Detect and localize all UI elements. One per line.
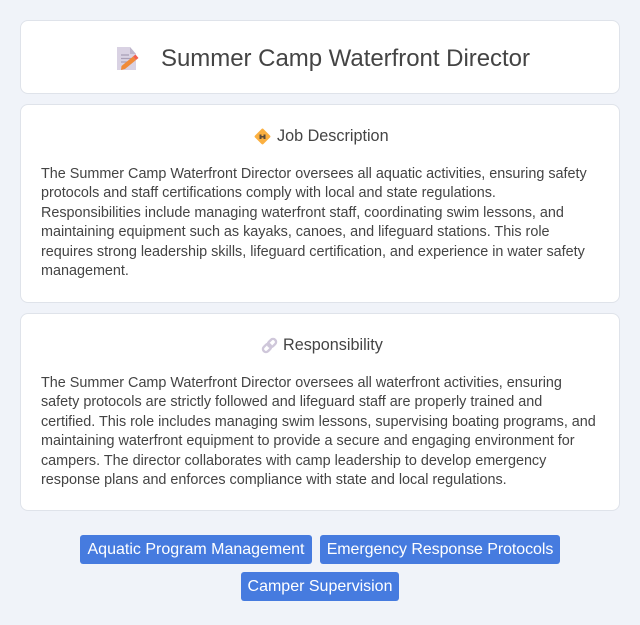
- icon: chain link: [262, 338, 278, 354]
- tag: emergency response protocols: Emergency Response Protocols: [327, 541, 553, 558]
- text block: responsibility: response plans and enforces compliance with state and local regulations.: [41, 472, 507, 488]
- tag: camper supervision: Camper Supervision: [248, 578, 392, 595]
- text block: job description: management.: [41, 263, 129, 279]
- text block: job description: The Summer Camp Waterfront Director oversees all aquatic activities, ensuring safety: [41, 166, 587, 182]
- panel: title card: [20, 20, 620, 94]
- tag: aquatic program management: Aquatic Program Management: [88, 541, 304, 558]
- title: Summer Camp Waterfront Director: [161, 45, 530, 72]
- text block: responsibility: certified. This role includes managing swim lessons, supervising boating programs, and: [41, 414, 596, 430]
- text block: job description: maintaining equipment such as kayaks, canoes, and lifeguard stations. This role: [41, 224, 550, 240]
- icon: diamond road sign: [254, 128, 270, 144]
- panel: job description: [20, 104, 620, 303]
- text block: responsibility: The Summer Camp Waterfront Director oversees all waterfront activities, ensuring: [41, 375, 562, 391]
- heading: job description: Job Description: [277, 127, 389, 145]
- text block: job description: requires strong leadership skills, lifeguard certification, and experience in water safety: [41, 244, 585, 260]
- text block: job description: Responsibilities include managing waterfront staff, coordinating swim lessons, and: [41, 205, 564, 221]
- text block: responsibility: maintaining waterfront equipment to provide a secure and engaging environment for: [41, 433, 575, 449]
- tag: aquatic program management: [80, 535, 312, 564]
- panel: responsibility: [20, 313, 620, 511]
- text block: job description: [41, 166, 587, 279]
- text block: responsibility: safety protocols are strictly followed and lifeguard staff are properly trained and: [41, 394, 542, 410]
- heading: responsibility: Responsibility: [283, 336, 383, 354]
- icon: document with pencil: [117, 47, 138, 70]
- tag: emergency response protocols: [320, 535, 560, 564]
- tag: camper supervision: [241, 572, 399, 601]
- text block: job description: protocols and staff certifications comply with local and state regulations.: [41, 185, 496, 201]
- text block: responsibility: [41, 375, 596, 488]
- text block: responsibility: campers. The director collaborates with camp leadership to develop emergency: [41, 453, 546, 469]
